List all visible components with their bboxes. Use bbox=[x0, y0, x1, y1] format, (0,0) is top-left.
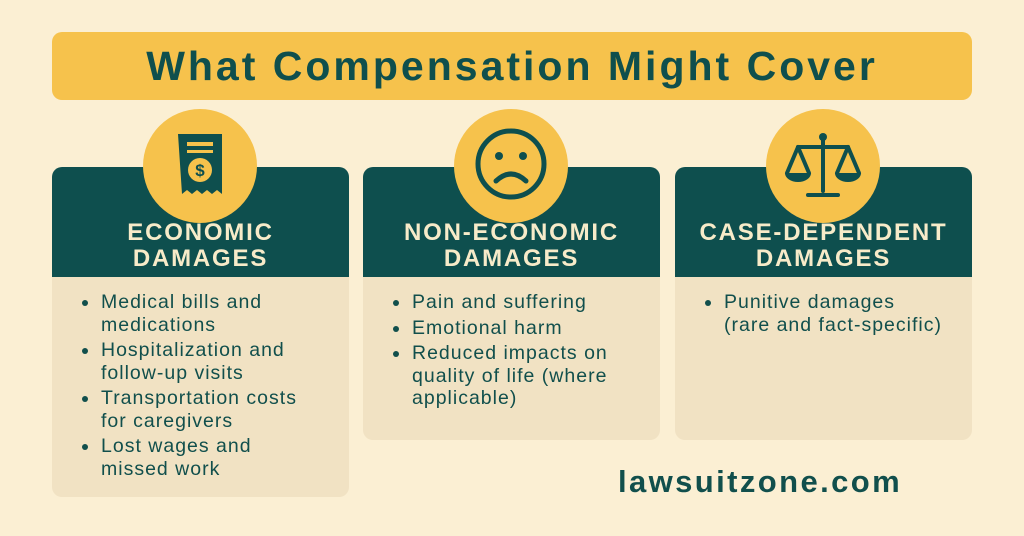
title bbox=[52, 32, 972, 100]
list: economic: for caregivers bbox=[101, 410, 233, 432]
list: non-economic: Emotional harm bbox=[412, 316, 563, 338]
list: economic: Hospitalization and bbox=[101, 339, 285, 361]
panel: non-economic damages bbox=[363, 109, 660, 440]
header: non-economic: DAMAGES bbox=[444, 245, 579, 272]
header: non-economic bbox=[363, 167, 660, 277]
list: case-dependent: Punitive damages bbox=[724, 291, 895, 313]
list: non-economic: Reduced impacts on bbox=[412, 342, 608, 364]
title: What Compensation Might Cover bbox=[146, 43, 878, 89]
header: case-dependent: CASE-DEPENDENT bbox=[700, 219, 947, 246]
icon: receipt with dollar: $ bbox=[195, 161, 205, 180]
list: economic: Lost wages and bbox=[101, 435, 252, 457]
list: economic: Medical bills and bbox=[101, 291, 262, 313]
list: economic: follow-up visits bbox=[101, 362, 244, 384]
list: economic: Transportation costs bbox=[101, 387, 297, 409]
list: non-economic: applicable) bbox=[412, 387, 517, 409]
panel: case-dependent damages bbox=[675, 109, 972, 440]
header: non-economic: NON-ECONOMIC bbox=[404, 219, 619, 246]
list: case-dependent bbox=[675, 277, 972, 440]
header: case-dependent: DAMAGES bbox=[756, 245, 891, 272]
list: non-economic bbox=[363, 277, 660, 440]
panel: economic damages bbox=[52, 109, 349, 497]
list: case-dependent: (rare and fact-specific) bbox=[724, 314, 942, 336]
header: economic: DAMAGES bbox=[133, 245, 268, 272]
icon: receipt with dollar bbox=[143, 109, 257, 223]
list: economic: medications bbox=[101, 314, 216, 336]
icon: scales bbox=[766, 109, 880, 223]
list: economic bbox=[52, 277, 349, 497]
list: economic: missed work bbox=[101, 458, 220, 480]
footer: website: lawsuitzone.com bbox=[618, 464, 902, 499]
icon: sad face bbox=[454, 109, 568, 223]
list: non-economic: Pain and suffering bbox=[412, 291, 587, 313]
header: economic bbox=[52, 167, 349, 277]
list: non-economic: quality of life (where bbox=[412, 364, 607, 386]
header: case-dependent bbox=[675, 167, 972, 277]
header: economic: ECONOMIC bbox=[127, 219, 274, 246]
